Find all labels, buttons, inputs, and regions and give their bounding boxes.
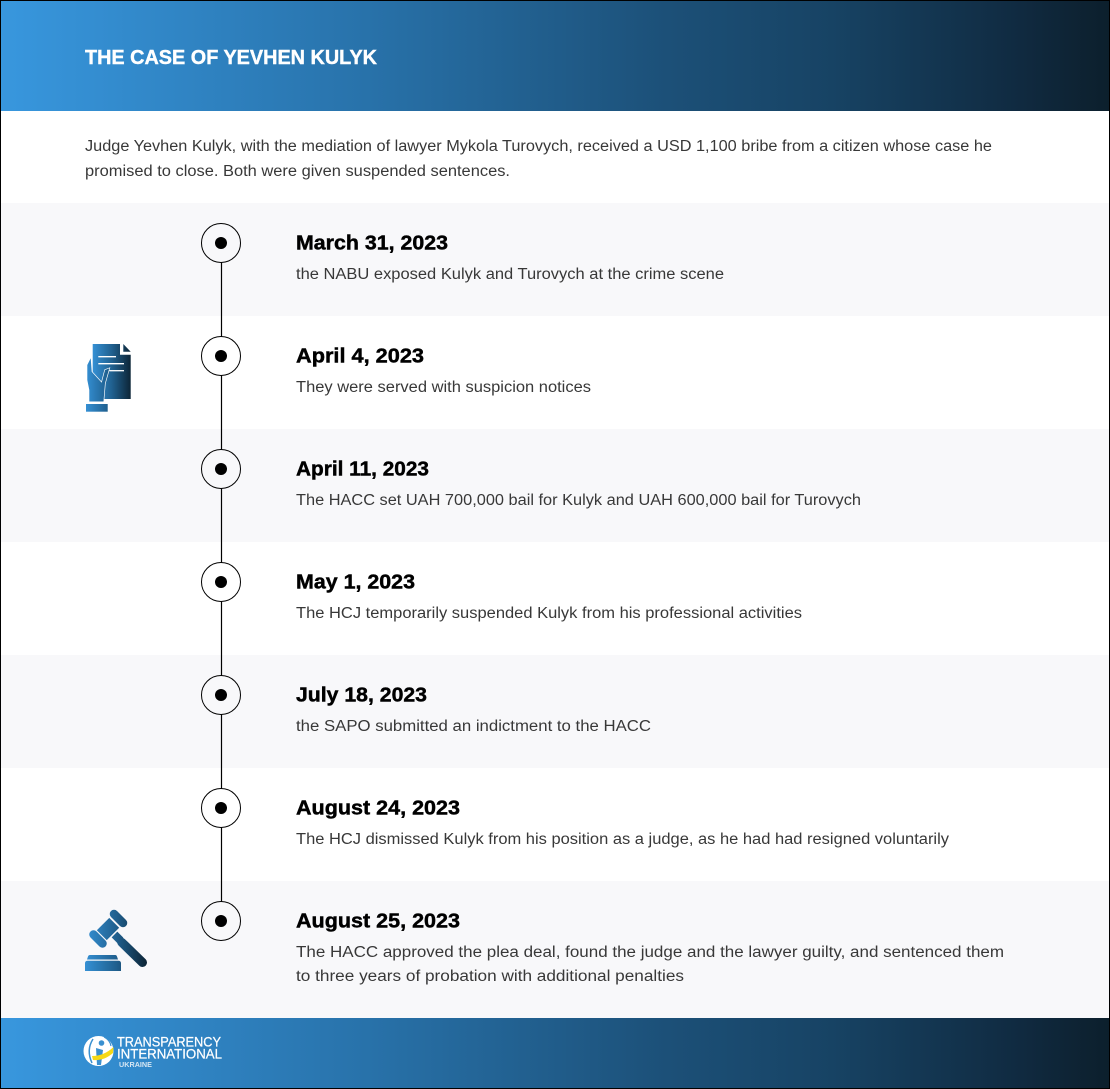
intro text: promised to close. Both were given suspended sentences. xyxy=(85,163,510,180)
event: August 24, 2023: August 24, 2023 xyxy=(296,798,460,820)
logo: Transparency International Ukraine: TRANSPARENCY xyxy=(117,1034,222,1050)
event: May 1, 2023 xyxy=(202,562,802,622)
event: May 1, 2023: May 1, 2023 xyxy=(296,572,415,594)
event: July 18, 2023: the SAPO submitted an indictment to the HACC xyxy=(296,718,651,735)
timeline axis xyxy=(220,243,222,921)
row backgrounds xyxy=(0,203,1110,1018)
event: August 25, 2023 xyxy=(202,902,1004,985)
icon: gavel xyxy=(85,914,142,971)
event: April 4, 2023: April 4, 2023 xyxy=(296,346,424,368)
icon: document in hand xyxy=(86,344,131,412)
footer band xyxy=(0,1018,1110,1089)
intro text: Judge Yevhen Kulyk, with the mediation of lawyer Mykola Turovych, received a USD 1,100 bribe from a citizen whose case he xyxy=(85,138,992,155)
event: April 11, 2023: The HACC set UAH 700,000 bail for Kulyk and UAH 600,000 bail for Turovych xyxy=(296,492,861,509)
event: May 1, 2023: The HCJ temporarily suspended Kulyk from his professional activities xyxy=(296,605,802,622)
header band xyxy=(0,0,1110,111)
event: March 31, 2023 xyxy=(202,224,724,283)
event: August 25, 2023: August 25, 2023 xyxy=(296,910,460,932)
title: THE CASE OF YEVHEN KULYK xyxy=(85,46,377,69)
event: August 24, 2023: The HCJ dismissed Kulyk from his position as a judge, as he had had resigned voluntarily xyxy=(296,831,949,848)
event: August 24, 2023 xyxy=(202,788,949,848)
event: April 4, 2023 xyxy=(202,336,591,396)
logo: Transparency International Ukraine xyxy=(84,1034,222,1069)
event: July 18, 2023: July 18, 2023 xyxy=(296,684,427,706)
event: April 11, 2023 xyxy=(202,450,861,509)
event: July 18, 2023 xyxy=(202,676,651,735)
event: March 31, 2023: the NABU exposed Kulyk and Turovych at the crime scene xyxy=(296,266,724,283)
event: August 25, 2023: The HACC approved the plea deal, found the judge and the lawyer guilty, and sentenced them xyxy=(296,944,1004,961)
event: August 25, 2023: to three years of probation with additional penalties xyxy=(296,968,684,985)
event: April 4, 2023: They were served with suspicion notices xyxy=(296,379,591,396)
logo: Transparency International Ukraine: INTERNATIONAL xyxy=(117,1046,222,1062)
logo: Transparency International Ukraine: UKRAINE xyxy=(119,1062,152,1069)
intro text xyxy=(85,138,992,180)
event: April 11, 2023: April 11, 2023 xyxy=(296,458,429,480)
event: March 31, 2023: March 31, 2023 xyxy=(296,232,448,254)
